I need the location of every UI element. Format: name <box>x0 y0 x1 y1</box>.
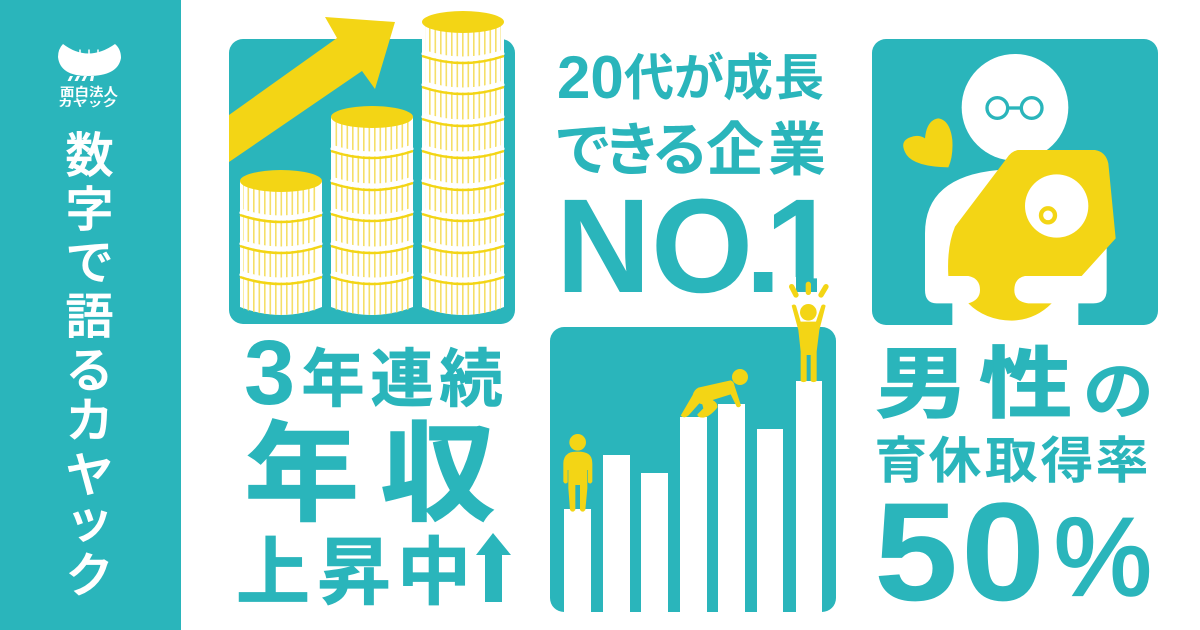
icon: glasses <box>987 98 1042 118</box>
icon: climbing person <box>681 369 748 418</box>
big number: O <box>651 172 753 321</box>
heading: paternity leave: の <box>1082 340 1154 433</box>
heading: annual income: 年連続 <box>302 329 502 420</box>
panel: bars <box>550 284 836 612</box>
heading: paternity leave <box>874 320 1154 630</box>
heading: paternity leave: 性 <box>979 320 1073 434</box>
coin stack tall <box>422 11 504 315</box>
coin stack small <box>240 170 322 315</box>
heading: growth: できる企業 <box>554 103 826 187</box>
heading: paternity leave: 5 <box>874 473 958 630</box>
heading: paternity leave: 育休取得率 <box>874 420 1149 493</box>
coin stack medium <box>331 106 413 315</box>
logo: kayak: 面白法人 <box>60 82 119 100</box>
heading: paternity leave: 0 <box>961 473 1045 630</box>
big number <box>564 198 817 294</box>
icon: up arrow <box>476 533 511 602</box>
arrow <box>229 17 395 162</box>
big number: 1 <box>765 172 838 321</box>
heading: annual income: 3 <box>244 322 295 424</box>
heading: annual income: 上昇中 <box>236 513 471 620</box>
heading: growth: 代が成長 <box>624 38 824 110</box>
heading: annual income: 年収 <box>245 387 495 544</box>
sidebar <box>0 0 181 630</box>
icon: standing person <box>563 434 592 512</box>
icon: heart <box>903 118 952 167</box>
heading: growth: 20 <box>557 44 624 111</box>
heading: paternity leave: 男 <box>875 320 969 434</box>
person body <box>925 170 1107 325</box>
icon: cheering person <box>792 284 826 382</box>
vertical title: 数字で語るカヤック <box>66 116 114 606</box>
person head <box>962 54 1068 161</box>
heading: growth <box>558 52 824 294</box>
heading: annual income <box>236 322 511 620</box>
logo: kayak <box>58 44 121 110</box>
heading: paternity leave: % <box>1054 496 1152 619</box>
panel: coins <box>229 11 515 324</box>
panel: father and baby <box>872 39 1158 325</box>
baby <box>948 150 1116 321</box>
logo: kayak: カヤック <box>58 95 117 110</box>
big number: . <box>745 172 781 321</box>
big number: N <box>556 172 651 321</box>
